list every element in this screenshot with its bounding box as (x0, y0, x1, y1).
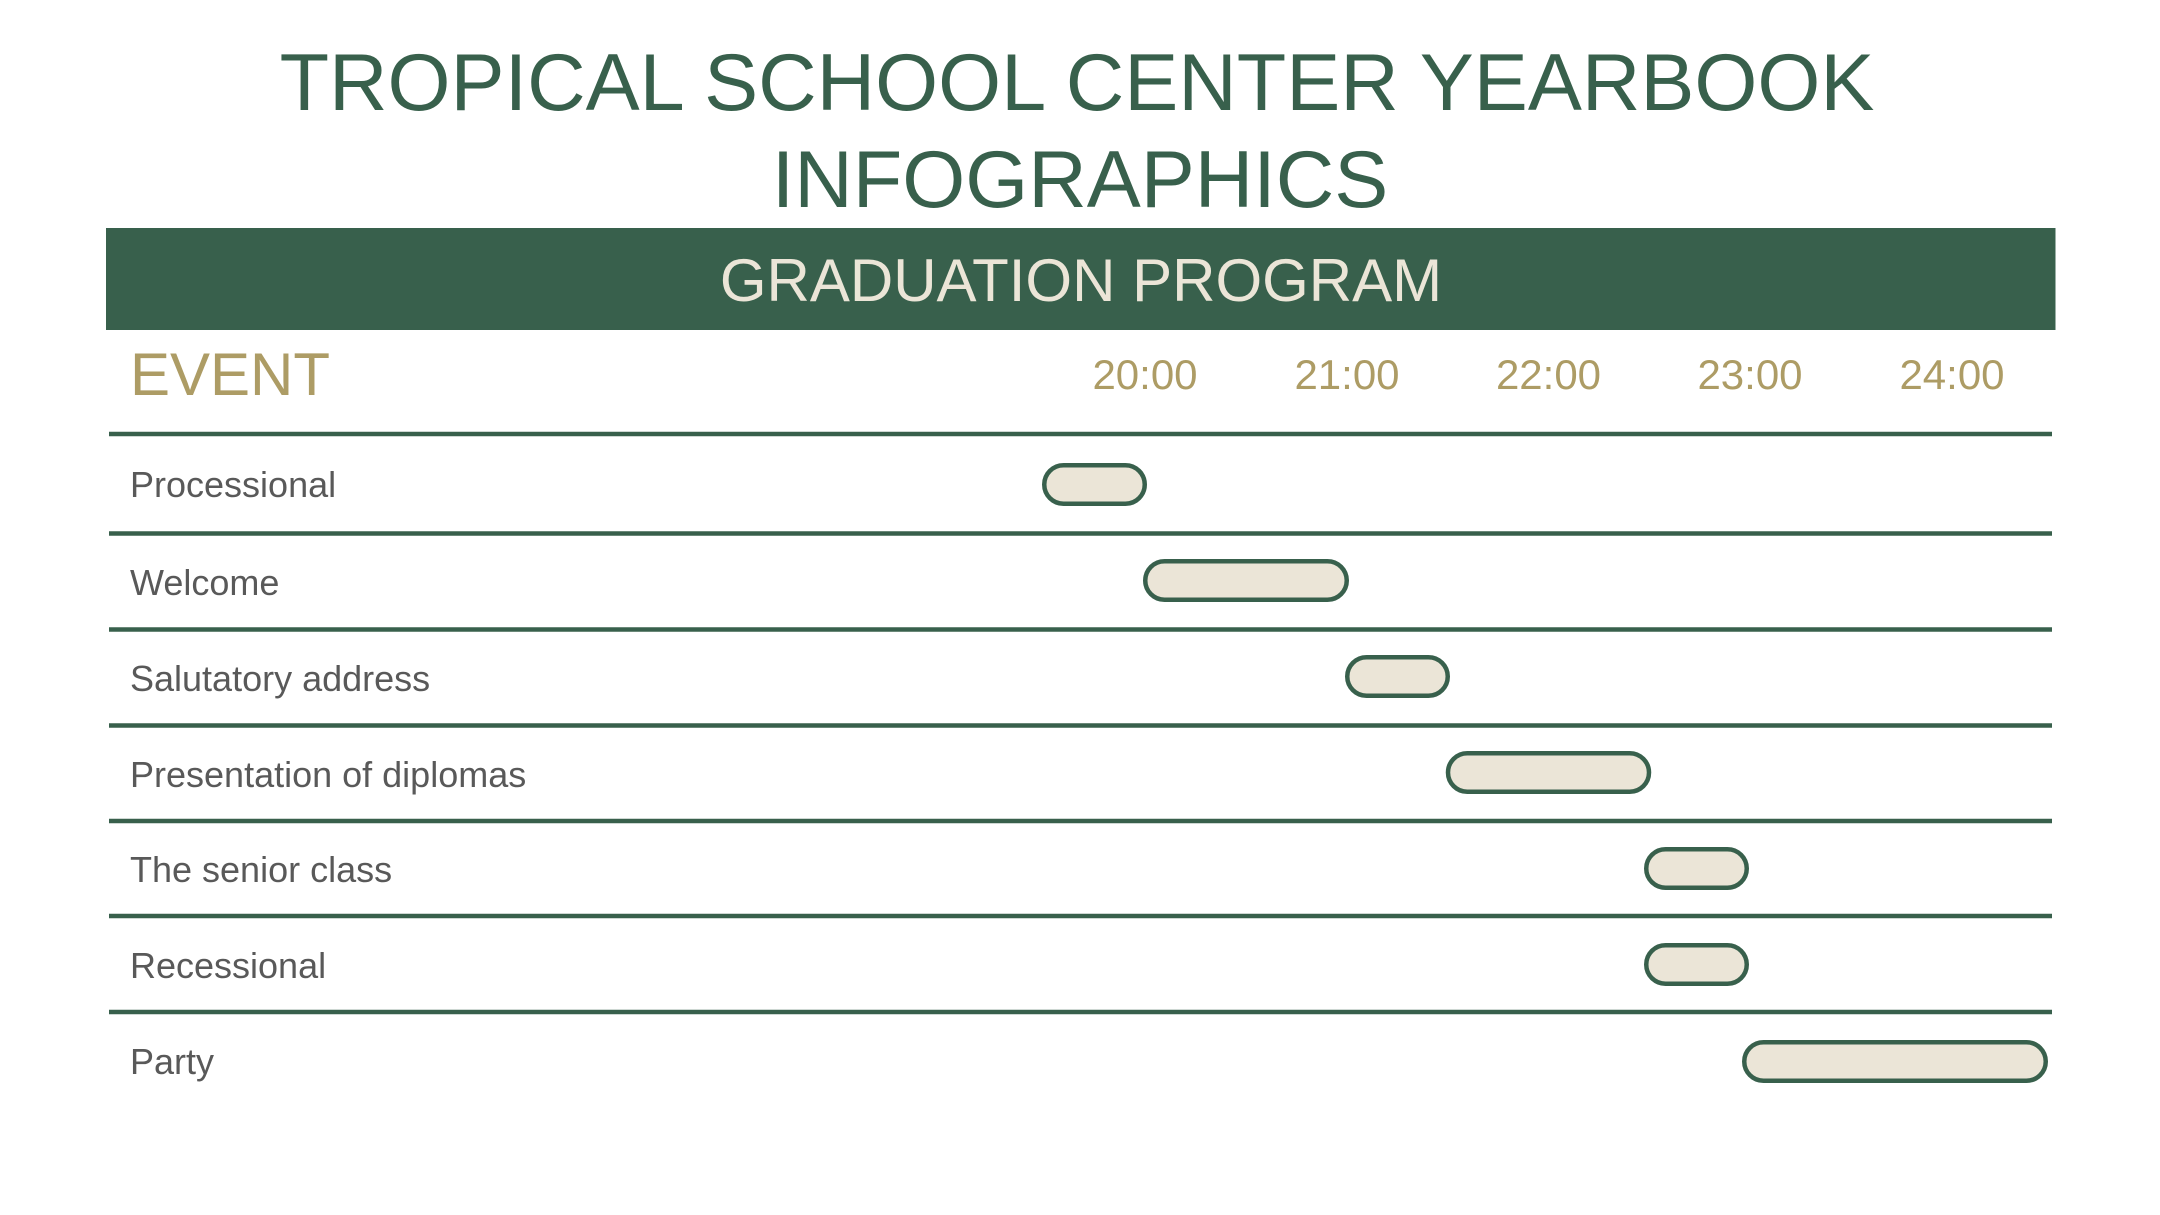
time axis headings: 20:00 (1092, 351, 1198, 398)
title (280, 38, 1874, 225)
row: Welcome (130, 561, 1347, 603)
row: Salutatory address: Salutatory address (130, 658, 430, 699)
row: Recessional (130, 945, 1747, 986)
row: Presentation of diplomas (130, 753, 1649, 795)
row: The senior class (130, 849, 1747, 890)
row: Presentation of diplomas: Presentation of diplomas (130, 754, 526, 795)
row: Processional (130, 464, 1145, 505)
time axis headings: 24:00 (1899, 351, 2005, 398)
row: The senior class: The senior class (130, 849, 392, 890)
row: Recessional: Recessional (130, 945, 326, 986)
time axis headings: 23:00 (1697, 351, 1803, 398)
title: INFOGRAPHICS (772, 135, 1388, 225)
row: Salutatory address (130, 657, 1448, 699)
row: Processional: Processional (130, 464, 336, 505)
title: TROPICAL SCHOOL CENTER YEARBOOK (280, 38, 1874, 128)
row: Party: Party (130, 1041, 214, 1082)
time axis headings: 21:00 (1294, 351, 1400, 398)
time axis headings: 22:00 (1496, 351, 1601, 398)
panel: program header banner (106, 228, 2056, 330)
row: Welcome: Welcome (130, 562, 279, 603)
column heading: event: EVENT (130, 341, 330, 408)
row: Party (130, 1041, 2046, 1082)
time axis headings (1092, 351, 2005, 398)
panel: program header banner: GRADUATION PROGRAM (720, 247, 1442, 314)
